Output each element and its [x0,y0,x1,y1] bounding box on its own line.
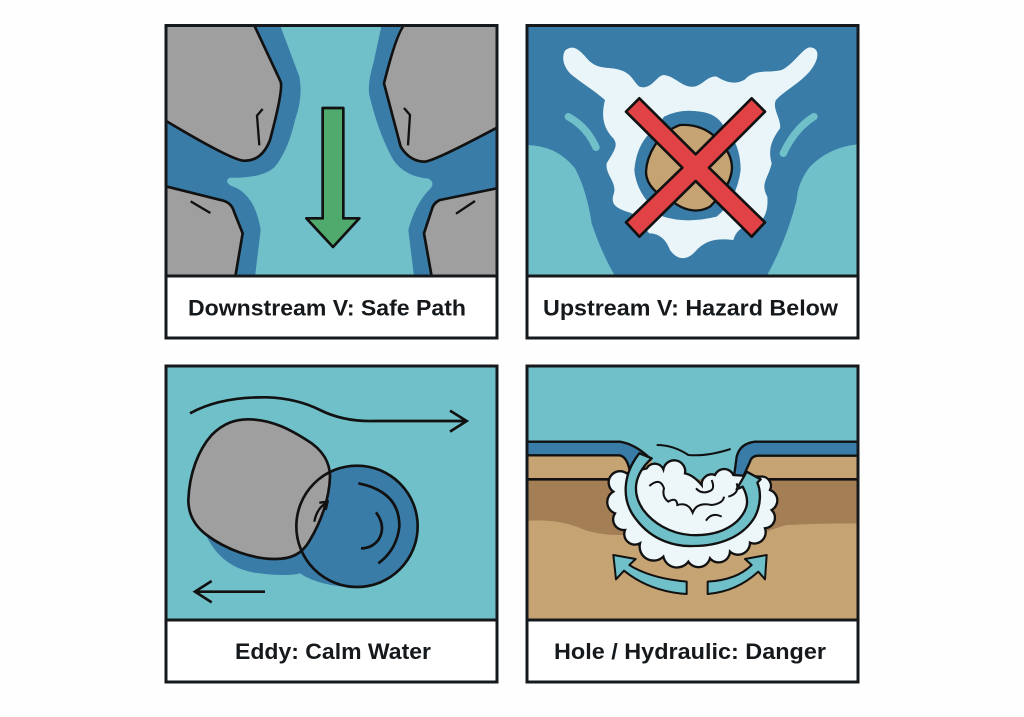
panel border [166,366,497,682]
panel border [527,26,858,338]
illustration: upstream V hazard [525,26,858,277]
right ripple [783,117,814,153]
right blue inflow [733,440,856,474]
grey rock [188,419,330,559]
water surface line [657,445,731,455]
eddy swirl lines [358,483,399,563]
panel background [166,366,497,682]
lower left arrow [613,555,687,594]
dark soil band [525,479,858,535]
panel border [166,26,497,338]
panel background [527,366,858,682]
caption: Eddy: Calm Water [235,639,431,664]
rock crack marks [191,108,475,214]
small swirl arrow [314,502,328,522]
caption: Hole / Hydraulic: Danger [554,639,826,664]
panel: Eddy [166,366,497,682]
eddy shadow [206,536,344,587]
right teal water [766,144,858,277]
teal water [528,368,856,480]
teal curling current [626,453,761,546]
illustration: eddy behind rock [166,366,497,620]
caption: Downstream V: Safe Path [188,296,466,320]
lower right arrow [708,555,767,594]
panel: Upstream V [525,25,858,338]
dark pool around rock [634,111,741,220]
top-left rock [163,23,281,161]
panel background [527,25,858,338]
right dark water [369,25,498,277]
left blue inflow [525,442,650,472]
illustration: hydraulic cross-section [525,365,858,620]
foam inner curls [649,480,737,521]
eddy pool [318,467,416,586]
left ripple [568,117,596,147]
submerged rock [646,125,732,210]
illustration: downstream V channel between rocks [163,23,500,278]
return current arrow [195,581,265,602]
foam cloud [607,460,777,567]
panel: Downstream V [163,23,500,338]
panel background [166,25,497,338]
red X [626,98,765,237]
white foam V [563,47,817,258]
eddy outline [296,466,418,587]
bottom-right rock [424,188,500,278]
panel: Hole / Hydraulic [525,365,858,682]
left teal water [525,145,616,277]
main current arrow [190,397,467,432]
top-right rock [384,23,500,162]
green arrow [306,108,359,247]
bottom-left rock [163,186,243,278]
left dark water [165,25,301,277]
caption: Upstream V: Hazard Below [543,296,839,320]
panel border [527,366,858,682]
